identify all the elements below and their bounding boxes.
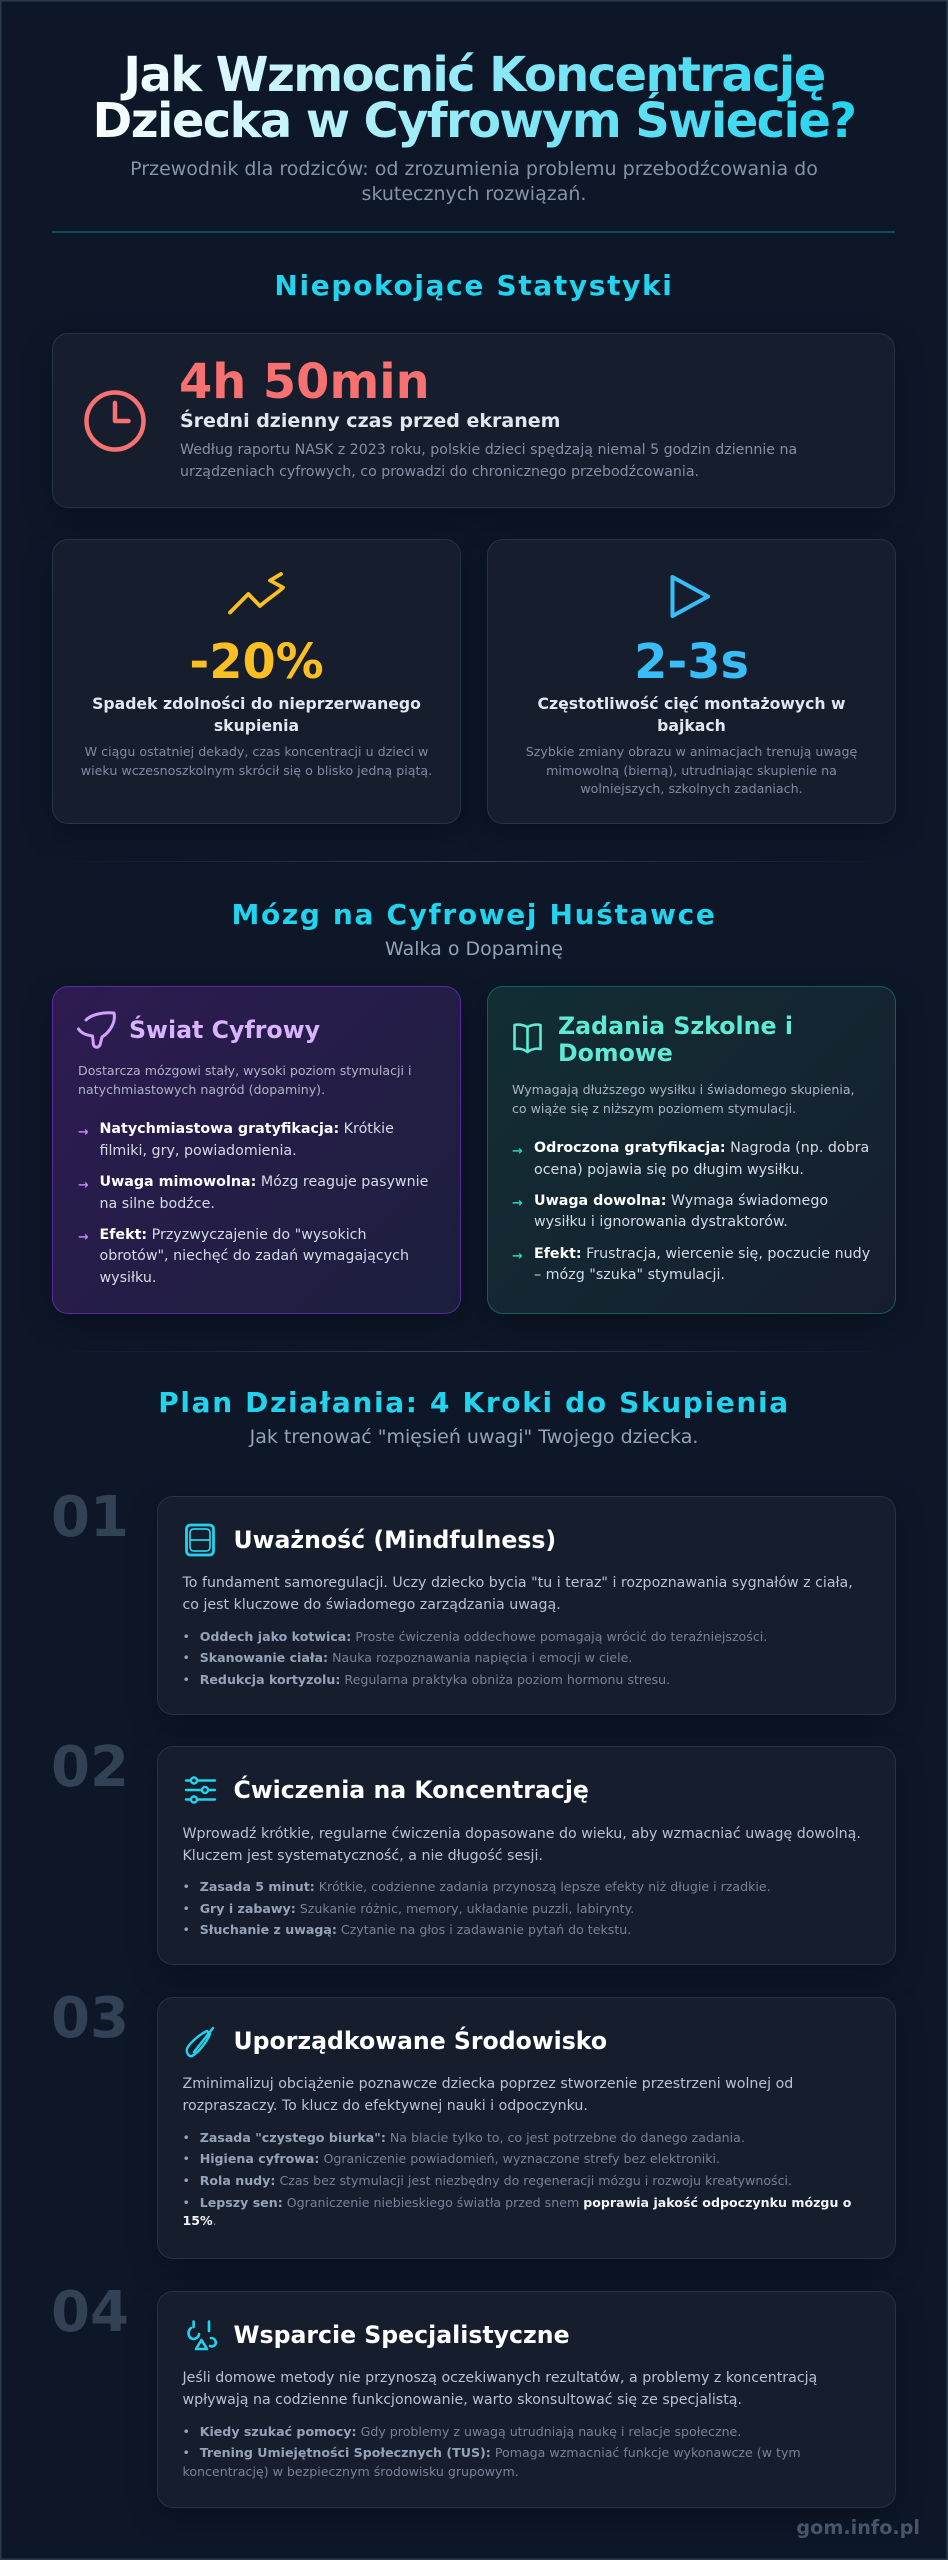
panel description <box>78 1063 412 1097</box>
panel: montage cuts stat <box>487 539 896 824</box>
stat description: urządzeniach cyfrowych, co prowadzi do chronicznego przebodźcowania. <box>180 464 699 480</box>
list item: ocena) pojawia się po długim wysiłku. <box>534 1162 804 1178</box>
step number 03: 03 <box>51 1986 129 2050</box>
bullet list: 15%. <box>182 2213 217 2228</box>
panel: step 3 ordered environment <box>156 1996 896 2258</box>
stat description <box>526 744 857 796</box>
list item <box>534 1140 869 1178</box>
list item: obrotów", niechęć do zadań wymagających <box>100 1248 409 1264</box>
stat value: 2-3s <box>634 635 749 690</box>
arrow marker: → <box>512 1196 523 1211</box>
step body: co jest kluczowe do świadomego zarządzania uwagą. <box>182 1597 561 1613</box>
bullet list: Zasada "czystego biurka": Na blacie tylko to, co jest potrzebne do danego zadania. Higiena cyfrowa: Ograniczenie powiadomień, wyznaczone strefy bez elektroniki. Rola nudy: Czas bez stymulacji jest niezbędny do regeneracji mózgu i rozwoju kreatywności. Lepszy sen: Ograniczenie niebieskiego światła przed snem poprawia jakość odpoczynku mózgu o <box>200 2130 851 2210</box>
step number 02: 02 <box>51 1735 129 1800</box>
source watermark: gom.info.pl <box>796 2516 920 2539</box>
bullet list: • <box>182 1672 190 1687</box>
icon: jagged trend line <box>228 572 285 614</box>
step body <box>182 1575 853 1613</box>
bullet list: • <box>182 2195 190 2210</box>
step body: To fundament samoregulacji. Uczy dziecko bycia "tu i teraz" i rozpoznawania sygnałów z ciała, <box>182 1575 853 1591</box>
panel description: Dostarcza mózgowi stały, wysoki poziom stymulacji i <box>78 1063 412 1078</box>
panel: step 2 concentration exercises <box>156 1746 896 1965</box>
arrow marker: → <box>78 1125 89 1140</box>
list item <box>100 1121 394 1159</box>
bullet list: Zasada 5 minut: Krótkie, codzienne zadania przynoszą lepsze efekty niż długie i rzadkie. Gry i zabawy: Szukanie różnic, memory, układanie puzzli, labirynty. Słuchanie z uwagą: Czytanie na głos i zadawanie pytań do tekstu. <box>200 1879 771 1937</box>
panel heading: Domowe <box>558 1039 673 1067</box>
heading: statistics: Niepokojące Statystyki <box>274 269 674 302</box>
step heading: Uporządkowane Środowisko <box>234 2026 607 2054</box>
stat label: bajkach <box>657 716 726 735</box>
bullet list: • <box>182 2424 190 2438</box>
stat description: Szybkie zmiany obrazu w animacjach trenują uwagę <box>526 744 857 759</box>
stat description: Według raportu NASK z 2023 roku, polskie dzieci spędzają niemal 5 godzin dziennie na <box>180 442 797 458</box>
stat description <box>180 442 797 480</box>
subtitle <box>130 158 818 205</box>
subtitle: skutecznych rozwiązań. <box>362 183 586 205</box>
stat description: mimowolną (bierną), utrudniając skupienie na <box>546 763 837 778</box>
arrow marker: → <box>78 1178 89 1193</box>
bullet list: • <box>182 2151 190 2166</box>
list item: na silne bodźce. <box>100 1196 215 1212</box>
bullet list: koncentrację) w bezpiecznym środowisku grupowym. <box>182 2464 519 2479</box>
bullet list: • <box>182 2445 190 2460</box>
arrow marker: → <box>512 1144 523 1158</box>
stat description: W ciągu ostatniej dekady, czas koncentracji u dzieci w <box>85 744 428 759</box>
stat description: wieku wczesnoszkolnym skrócił się o blisko jedną piątą. <box>81 763 432 778</box>
stat description: wolniejszych, szkolnych zadaniach. <box>580 781 803 796</box>
list item: Uwaga mimowolna: Mózg reaguje pasywnie <box>100 1174 428 1190</box>
bullet list: • <box>182 1922 190 1937</box>
bullet list: • <box>182 1628 190 1644</box>
icon: sliders <box>184 1776 216 1804</box>
subheading: action plan: Jak trenować "mięsień uwagi" Twojego dziecka. <box>250 1426 698 1448</box>
stat description <box>81 744 432 778</box>
bullet list: • <box>182 2130 190 2144</box>
list item: Efekt: Przyzwyczajenie do "wysokich <box>100 1226 367 1242</box>
subheading: dopamine: Walka o Dopaminę <box>385 938 563 960</box>
panel: digital world <box>52 986 461 1314</box>
step body: rozpraszaczy. To klucz do efektywnej nauki i odpoczynku. <box>182 2098 588 2114</box>
step heading: Wsparcie Specjalistyczne <box>234 2320 570 2348</box>
bullet list: • <box>182 2173 190 2188</box>
stat label: Spadek zdolności do nieprzerwanego <box>92 694 421 713</box>
icon: open book <box>513 1023 542 1054</box>
step number 04: 04 <box>51 2280 129 2344</box>
step body: Wprowadź krótkie, regularne ćwiczenia dopasowane do wieku, aby wzmacniać uwagę dowolną. <box>182 1826 861 1842</box>
bullet list: Oddech jako kotwica: Proste ćwiczenia oddechowe pomagają wrócić do teraźniejszości. Skanowanie ciała: Nauka rozpoznawania napięcia i emocji w ciele. Redukcja kortyzolu: Regularna praktyka obniża poziom hormonu stresu. <box>200 1628 767 1687</box>
step number 01: 01 <box>51 1484 129 1550</box>
list item: Odroczona gratyfikacja: Nagroda (np. dobra <box>534 1140 869 1156</box>
icon: specialist support <box>187 2320 218 2350</box>
panel: attention decline stat <box>52 539 461 824</box>
panel description: Wymagają dłuższego wysiłku i świadomego skupienia, <box>512 1082 855 1097</box>
list item <box>100 1226 409 1286</box>
step body: Kluczem jest systematyczność, a nie długość sesji. <box>182 1848 543 1864</box>
step heading: Ćwiczenia na Koncentrację <box>234 1776 589 1804</box>
stat label <box>537 694 846 735</box>
panel heading: Zadania Szkolne i <box>558 1012 793 1040</box>
panel heading <box>558 1012 793 1067</box>
subtitle: Przewodnik dla rodziców: od zrozumienia problemu przebodźcowania do <box>130 158 818 180</box>
step body <box>182 1826 861 1864</box>
list item: – mózg "szuka" stymulacji. <box>534 1267 725 1283</box>
heading: brain section: Mózg na Cyfrowej Huśtawce <box>231 898 716 931</box>
arrow marker: → <box>512 1249 523 1264</box>
stat label: skupienia <box>214 716 299 735</box>
icon: brain <box>76 1011 116 1049</box>
stat label: Średni dzienny czas przed ekranem <box>180 410 560 432</box>
icon: mindfulness <box>185 1524 215 1556</box>
panel: step 1 mindfulness <box>156 1496 896 1714</box>
panel: screen time stat <box>52 333 895 508</box>
list item <box>534 1246 870 1283</box>
list item: wysiłku. <box>100 1270 156 1286</box>
bullet list: • <box>182 1879 190 1894</box>
title: Jak Wzmocnić Koncentrację <box>123 46 825 102</box>
panel description: co wiąże się z niższym poziomem stymulacji. <box>512 1101 796 1116</box>
list item <box>534 1192 828 1230</box>
list item: Uwaga dowolna: Wymaga świadomego <box>534 1192 828 1208</box>
list item: Natychmiastowa gratyfikacja: Krótkie <box>100 1121 394 1137</box>
bullet list: • <box>182 1901 190 1916</box>
stat value: 4h 50min <box>179 355 430 410</box>
bullet list: Kiedy szukać pomocy: Gdy problemy z uwagą utrudniają naukę i relacje społeczne. Trening Umiejętności Społecznych (TUS): Pomaga wzmacniać funkcje wykonawcze (w tym <box>200 2424 801 2460</box>
stat value: -20% <box>189 635 324 690</box>
list item: filmiki, gry, powiadomienia. <box>100 1143 297 1159</box>
step body: Jeśli domowe metody nie przynoszą oczekiwanych rezultatów, a problemy z koncentracją <box>182 2370 817 2386</box>
bullet list: • <box>182 1650 190 1665</box>
step body: Zminimalizuj obciążenie poznawcze dziecka poprzez stworzenie przestrzeni wolnej od <box>182 2076 793 2092</box>
title: Dziecka w Cyfrowym Świecie? <box>93 93 855 149</box>
arrow marker: → <box>78 1230 89 1245</box>
icon: clock <box>84 390 146 452</box>
bullet list <box>182 2424 801 2479</box>
panel description <box>512 1082 855 1116</box>
list item: wysiłku i ignorowania dystraktorów. <box>534 1214 788 1230</box>
panel: step 4 specialist support <box>156 2290 896 2508</box>
heading: action plan: Plan Działania: 4 Kroki do Skupienia <box>158 1386 790 1419</box>
step heading: Uważność (Mindfulness) <box>234 1526 556 1554</box>
list item <box>100 1174 428 1212</box>
icon: pencil <box>186 2026 214 2058</box>
title <box>93 46 855 149</box>
step body: wpływają na codzienne funkcjonowanie, warto skonsultować się ze specjalistą. <box>182 2392 742 2408</box>
panel heading: Świat Cyfrowy <box>129 1016 320 1044</box>
icon: play triangle <box>670 575 710 618</box>
panel: school tasks <box>487 986 896 1314</box>
list item: Efekt: Frustracja, wiercenie się, poczucie nudy <box>534 1246 870 1262</box>
panel description: natychmiastowych nagród (dopaminy). <box>78 1082 325 1097</box>
stat label: Częstotliwość cięć montażowych w <box>537 694 846 713</box>
stat label <box>92 694 421 735</box>
step body <box>182 2076 793 2114</box>
step body <box>182 2370 817 2408</box>
